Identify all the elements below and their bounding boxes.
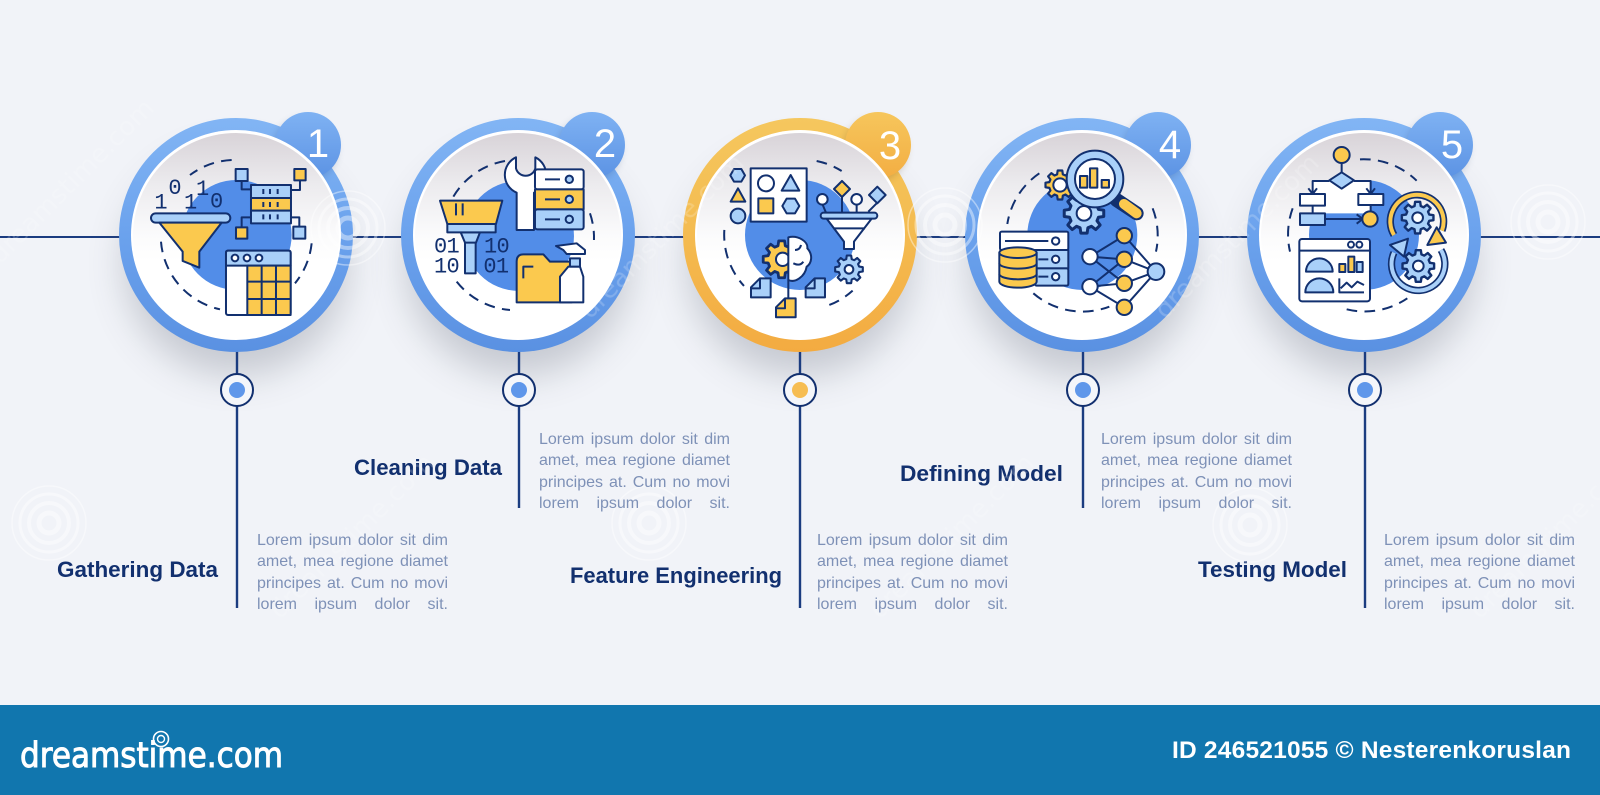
stem <box>799 350 801 608</box>
inner disc <box>413 130 623 340</box>
body text: step 3: lorem ipsum dolor sit. <box>817 596 1008 613</box>
heading: Feature Engineering: Feature Engineering <box>570 563 782 588</box>
stem <box>1082 350 1084 508</box>
badge <box>843 112 911 182</box>
panel: step 2 <box>401 112 635 508</box>
body text: step 3: amet, mea regione diamet <box>817 553 1008 570</box>
badge number: 2 <box>594 122 616 166</box>
badge <box>557 112 625 182</box>
ring <box>401 118 635 352</box>
stem <box>236 350 238 608</box>
watermark spirals <box>12 185 1585 562</box>
drop shadow <box>124 152 348 376</box>
icon: funnel, server and table: 1 <box>184 190 197 215</box>
body text: step 2: amet, mea regione diamet <box>539 452 730 469</box>
badge <box>1405 112 1473 182</box>
node <box>221 374 253 406</box>
body text: step 4 <box>1101 431 1292 512</box>
badge number: 5 <box>1441 123 1463 167</box>
icon: funnel, server and table: 0 <box>168 176 182 201</box>
icon: funnel, server and table: 1 <box>196 177 209 202</box>
stem <box>518 350 520 508</box>
body text: step 4: Lorem ipsum dolor sit dim <box>1101 431 1292 448</box>
body text: step 3: Lorem ipsum dolor sit dim <box>817 532 1008 549</box>
panel: step 5 <box>1247 112 1481 608</box>
body text: step 5: amet, mea regione diamet <box>1384 553 1575 570</box>
body text: step 4: amet, mea regione diamet <box>1101 452 1292 469</box>
body text: step 1: amet, mea regione diamet <box>257 553 448 570</box>
watermark text: dreamstime.com <box>864 448 1040 625</box>
body text: step 2: Lorem ipsum dolor sit dim <box>539 431 730 448</box>
drop shadow <box>406 152 630 376</box>
heading: Cleaning Data: Cleaning Data <box>354 455 502 480</box>
icon: broom, wrench, server and folder <box>434 157 594 310</box>
badge number: 4 <box>1159 123 1181 167</box>
node <box>784 374 816 406</box>
badge number: 3 <box>879 124 901 168</box>
badge <box>273 112 341 182</box>
panel: step 1 <box>119 112 353 608</box>
footer credit: ID 246521055 © Nesterenkoruslan <box>1172 737 1571 764</box>
connector line <box>0 236 1600 238</box>
icon: broom, wrench, server and folder: 01 <box>483 255 509 280</box>
body text: step 5 <box>1384 532 1575 613</box>
watermark text: dreamstime.com <box>574 148 750 325</box>
node <box>503 374 535 406</box>
body text: step 2 <box>539 431 730 512</box>
inner disc <box>977 130 1187 340</box>
drop shadow <box>688 152 912 376</box>
ring <box>965 118 1199 352</box>
watermark text: dreamstime.com <box>1149 148 1325 325</box>
icon: funnel, server and table: 1 <box>154 190 168 215</box>
footer logo: dreamstime.com <box>20 736 283 776</box>
heading: Defining Model: Defining Model <box>900 461 1063 486</box>
icon: funnel, server and table: 0 <box>210 189 223 214</box>
body text: step 1: lorem ipsum dolor sit. <box>257 596 448 613</box>
watermark text: dreamstime.com <box>264 448 440 625</box>
inner disc <box>1259 130 1469 340</box>
icon: broom, wrench, server and folder: 10 <box>484 235 509 260</box>
icon: broom, wrench, server and folder: 10 <box>434 255 459 280</box>
body text: step 5: lorem ipsum dolor sit. <box>1384 596 1575 613</box>
ring <box>119 118 353 352</box>
body text: step 3 <box>817 532 1008 613</box>
heading: Gathering Data: Gathering Data <box>57 557 218 582</box>
icon: flowchart, dashboard and gear cycle <box>1288 147 1446 311</box>
badge number: 1 <box>307 122 329 166</box>
icon: magnifier, database and neural network <box>999 151 1164 315</box>
icon: broom, wrench, server and folder: 01 <box>434 235 460 260</box>
drop shadow <box>1252 152 1476 376</box>
footer bar <box>0 705 1600 795</box>
panel: step 4 <box>965 112 1199 508</box>
body text: step 2: principes at. Cum no movi <box>539 474 730 491</box>
node <box>1067 374 1099 406</box>
panel: step 3 <box>683 112 917 608</box>
heading: Testing Model: Testing Model <box>1198 557 1347 582</box>
body text: step 4: lorem ipsum dolor sit. <box>1101 495 1292 512</box>
node <box>1349 374 1381 406</box>
body text: step 5: Lorem ipsum dolor sit dim <box>1384 532 1575 549</box>
icon: funnel, server and table <box>151 160 312 315</box>
body text: step 4: principes at. Cum no movi <box>1101 474 1292 491</box>
watermark text <box>0 93 1600 625</box>
icon: shapes, brain and funnel <box>724 161 886 317</box>
body text: step 1: principes at. Cum no movi <box>257 575 448 592</box>
ring <box>1247 118 1481 352</box>
inner disc <box>695 130 905 340</box>
body text: step 2: lorem ipsum dolor sit. <box>539 495 730 512</box>
ring <box>683 118 917 352</box>
body text: step 1 <box>257 532 448 613</box>
badge <box>1123 112 1191 182</box>
stem <box>1364 350 1366 608</box>
body text: step 5: principes at. Cum no movi <box>1384 575 1575 592</box>
inner disc <box>131 130 341 340</box>
drop shadow <box>970 152 1194 376</box>
body text: step 3: principes at. Cum no movi <box>817 575 1008 592</box>
body text: step 1: Lorem ipsum dolor sit dim <box>257 532 448 549</box>
